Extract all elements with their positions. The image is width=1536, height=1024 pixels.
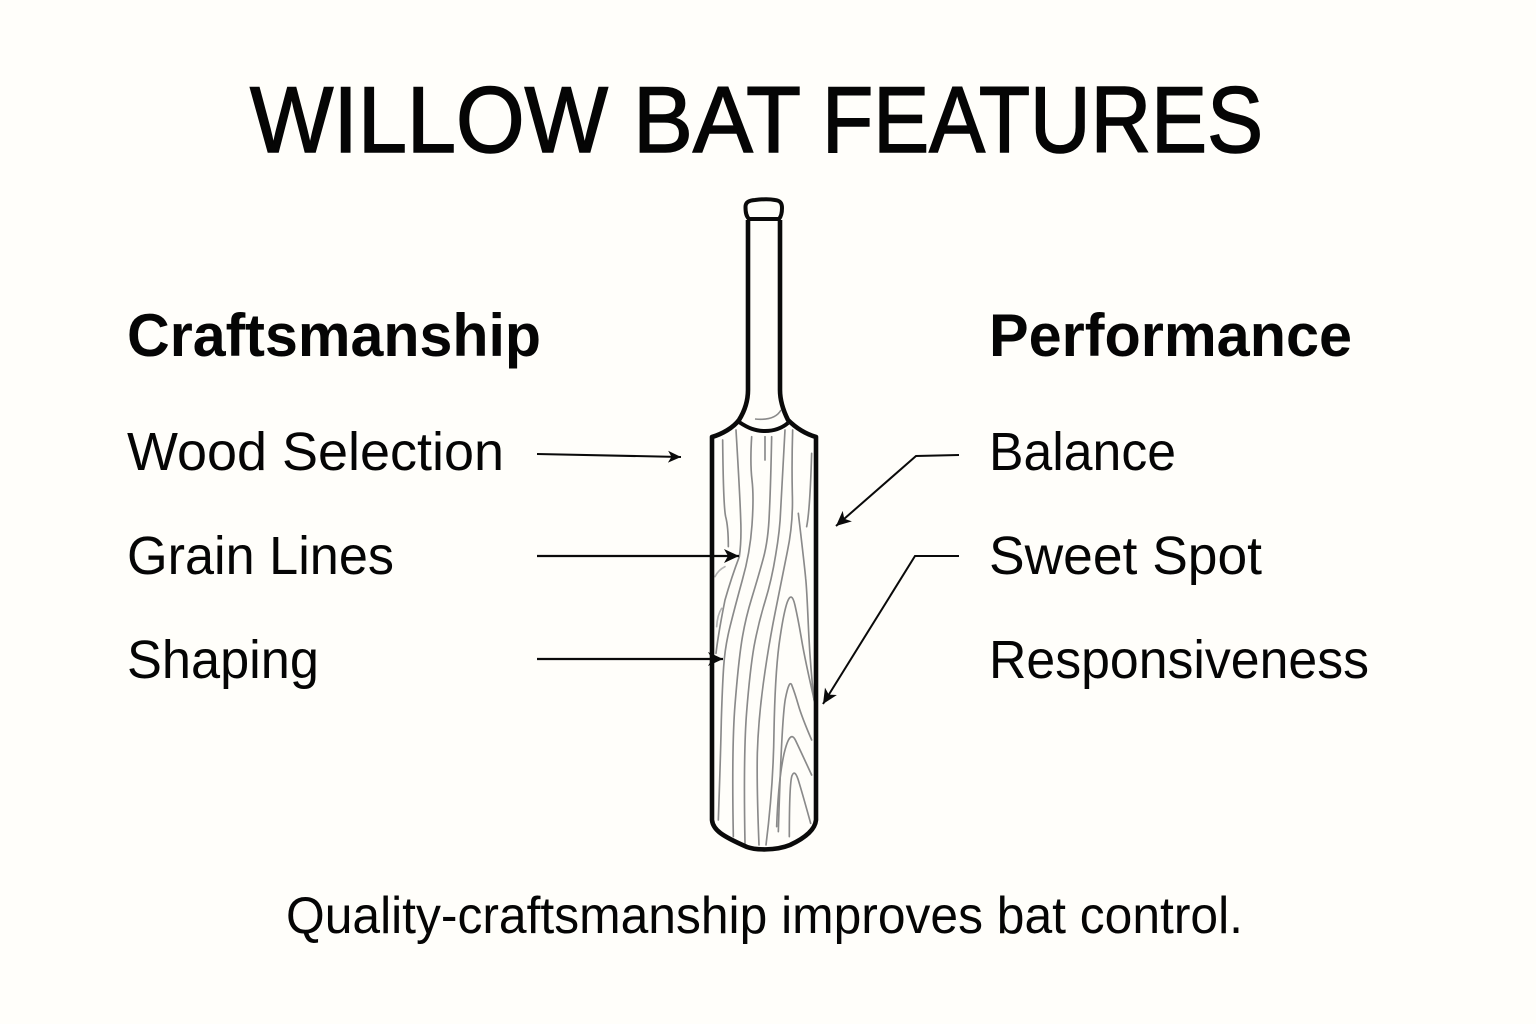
title bbox=[250, 67, 1263, 172]
title: BAT bbox=[633, 67, 801, 172]
panel: craftsmanship bbox=[127, 302, 541, 690]
bat illustration bbox=[712, 199, 816, 849]
label: shaping: Shaping bbox=[127, 630, 319, 690]
bat outline bbox=[712, 220, 816, 849]
arrow: grain lines bbox=[537, 555, 739, 557]
panel: performance bbox=[989, 302, 1369, 690]
label: sweet spot: Sweet Spot bbox=[989, 526, 1262, 586]
label: grain lines: Grain Lines bbox=[127, 526, 394, 586]
bat handle cap bbox=[746, 199, 782, 219]
arrow: wood selection bbox=[537, 454, 681, 457]
arrow: sweet spot bbox=[823, 556, 959, 704]
title: FEATURES bbox=[822, 67, 1263, 172]
heading: craftsmanship: Craftsmanship bbox=[127, 302, 541, 369]
label: responsiveness: Responsiveness bbox=[989, 630, 1369, 690]
bat grain lines bbox=[715, 430, 815, 845]
title: WILLOW bbox=[250, 67, 608, 172]
label: wood selection: Wood Selection bbox=[127, 422, 504, 482]
arrow: shaping bbox=[537, 658, 723, 660]
handle shading bbox=[755, 410, 781, 419]
heading: performance: Performance bbox=[989, 302, 1352, 369]
bat shoulder arc bbox=[739, 422, 788, 431]
label: balance: Balance bbox=[989, 422, 1176, 482]
caption: Quality-craftsmanship improves bat control. bbox=[286, 887, 1243, 945]
arrow: balance bbox=[836, 455, 959, 526]
